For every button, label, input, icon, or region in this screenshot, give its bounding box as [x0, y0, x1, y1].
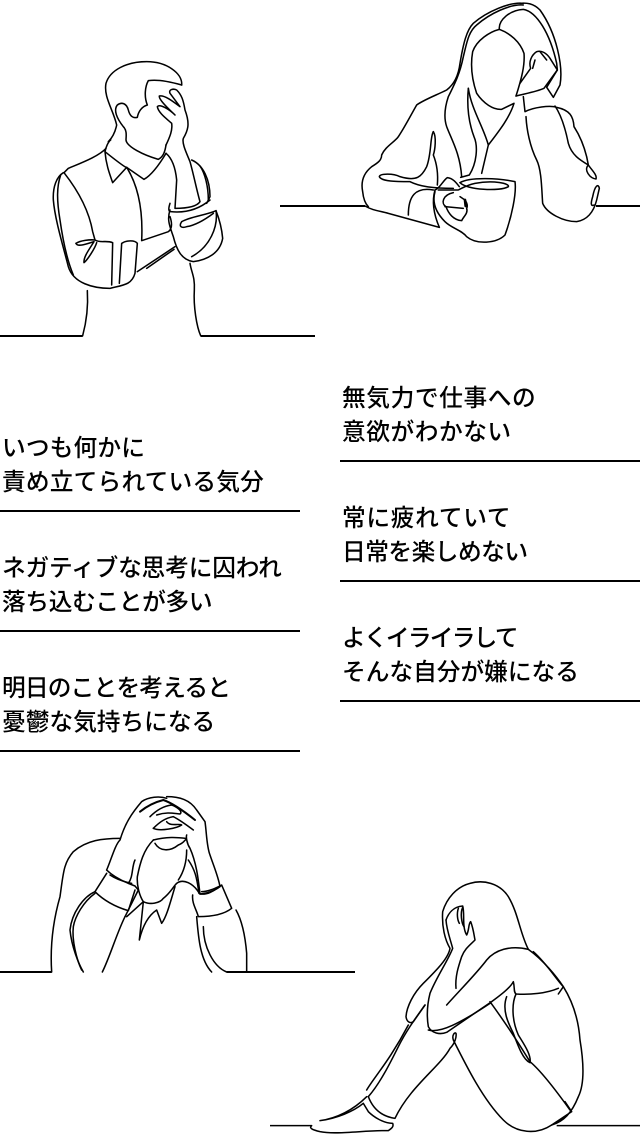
- text item: 明日のこと: [0, 664, 300, 752]
- text item: よくイライラして: [340, 614, 640, 702]
- text item: 明日のこと: 明日のことを考えると: [2, 676, 230, 702]
- text item: 無気力: 意欲がわかない: [342, 420, 512, 446]
- text item: よくイライラして: そんな自分が嫌になる: [342, 660, 579, 686]
- text item: いつも何かに: いつも何かに: [2, 436, 145, 462]
- text item: 常に疲れていて: 常に疲れていて: [342, 506, 511, 532]
- illustration: man holding forehead: [0, 60, 315, 337]
- text item: いつも何かに: 責め立てられている気分: [2, 470, 264, 496]
- text item: 無気力: [340, 374, 640, 462]
- text item: ネガティブな思考: ネガティブな思考に囚われ: [2, 556, 282, 582]
- text item: 明日のこと: 憂鬱な気持ちになる: [2, 710, 215, 736]
- text item: よくイライラして: よくイライラして: [342, 626, 517, 652]
- text item: ネガティブな思考: 落ち込むことが多い: [2, 590, 212, 616]
- text item: 無気力: 無気力で仕事への: [342, 386, 536, 412]
- illustration: woman with coffee cup: [280, 2, 640, 243]
- text item: いつも何かに: [0, 424, 300, 512]
- illustration: woman sitting hugging knees: [270, 881, 640, 1134]
- text item: 常に疲れていて: 日常を楽しめない: [342, 540, 528, 566]
- text item: 常に疲れていて: [340, 494, 640, 582]
- text item: ネガティブな思考: [0, 544, 300, 632]
- illustration: man clutching head: [0, 796, 355, 973]
